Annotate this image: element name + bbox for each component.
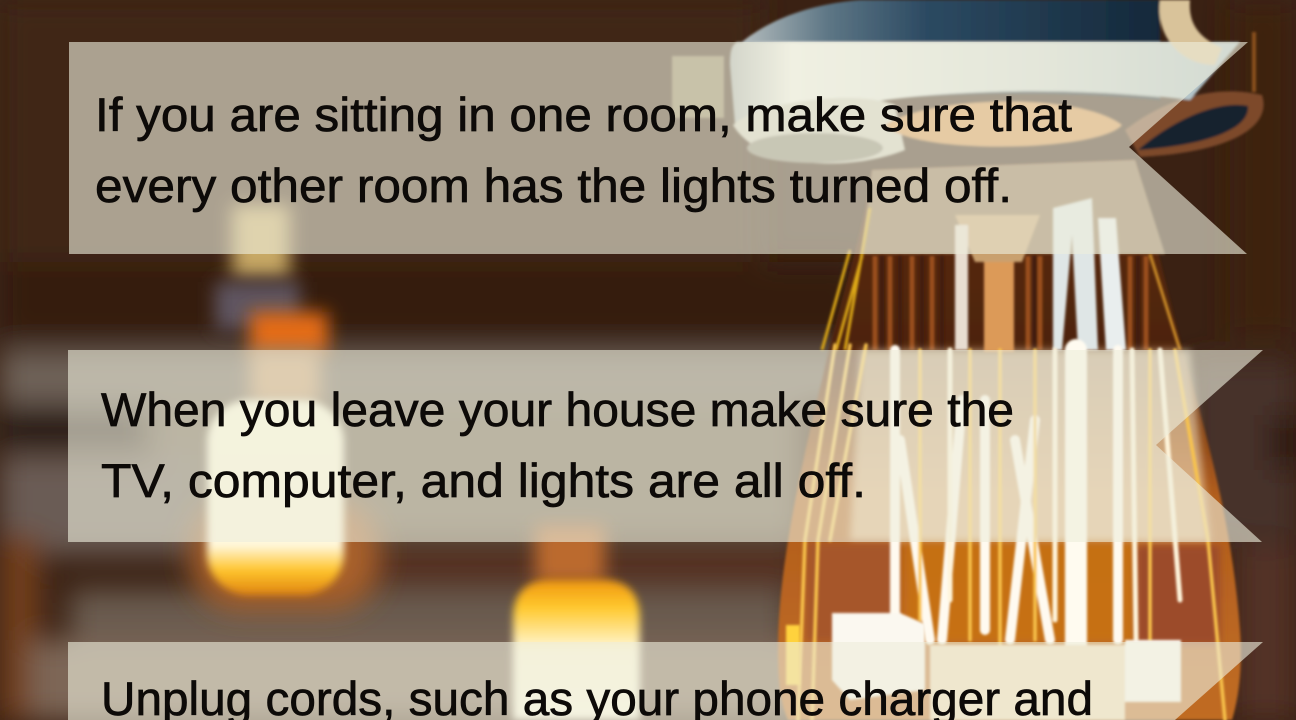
knurled knob: [1159, 0, 1222, 65]
ribbon 2 text: [101, 383, 1014, 507]
brass collar: [885, 101, 1122, 147]
ribbon 2 text: When you leave your house make sure the: [101, 383, 1014, 436]
left blurred bulb: [190, 205, 380, 610]
navy canopy top: [741, 0, 1162, 100]
pale neck of glass: [862, 160, 1165, 254]
bulb upper striations: [822, 208, 1180, 350]
bulb stem: [955, 198, 1126, 352]
small bracket: [672, 56, 724, 118]
ribbon 1 shape: [69, 42, 1248, 254]
concave shadow of disc: [747, 133, 883, 163]
disc underside: [733, 98, 905, 164]
lamp fixture: [672, 0, 1264, 164]
filaments: [798, 345, 1225, 720]
bright glow around filaments: [850, 350, 1210, 542]
brass side bar: [1252, 32, 1256, 92]
brass rim and navy underside: [1125, 91, 1264, 157]
ribbon 3: [68, 642, 1263, 720]
ribbon 2 text: TV, computer, and lights are all off.: [101, 454, 866, 507]
ribbon 3 shape: [68, 642, 1263, 720]
ribbon 1 text: If you are sitting in one room, make sure that: [95, 88, 1072, 141]
middle blurred bulb: [513, 525, 640, 720]
ribbon 1 text: every other room has the lights turned off.: [95, 159, 1012, 212]
large edison bulb: [778, 160, 1241, 720]
ribbon 1 text: [95, 88, 1072, 212]
ribbon 1: [69, 42, 1248, 254]
bulb glass: [778, 160, 1241, 720]
silver canopy band: [730, 42, 1240, 130]
ribbon 2 shape: [68, 350, 1263, 542]
ribbon 2: [68, 350, 1263, 542]
glowing lower glass: [806, 542, 1220, 645]
filament base blocks: [786, 613, 1181, 720]
